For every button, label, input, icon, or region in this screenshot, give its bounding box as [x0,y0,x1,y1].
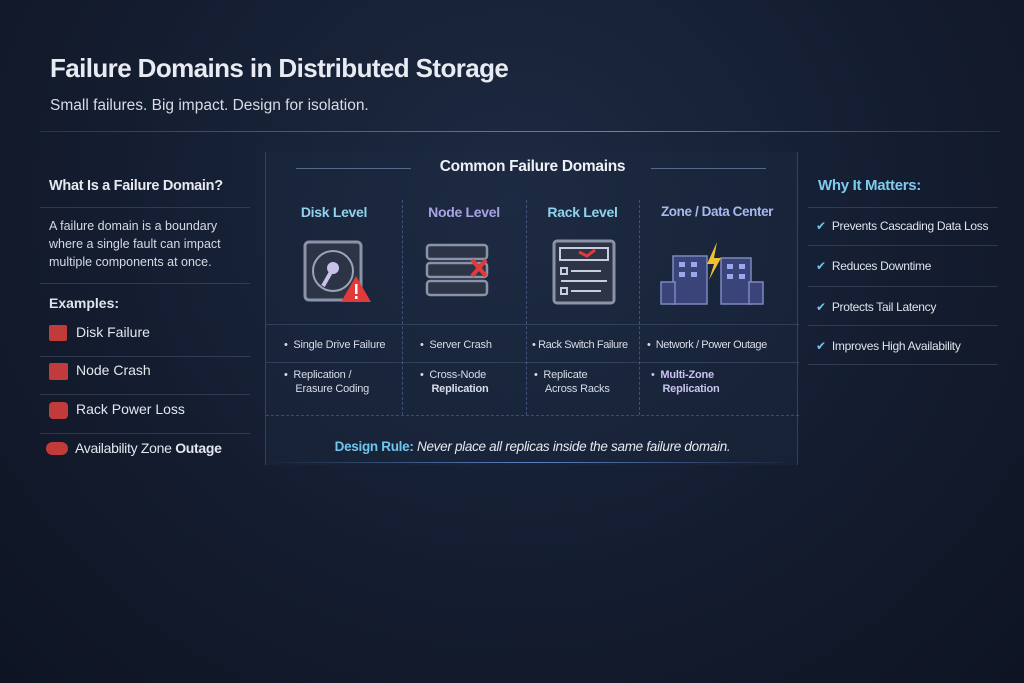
column: disk level: Disk Level [301,204,367,220]
column: zone / data center: • Multi-Zone [651,369,714,381]
design rule callout: Design Rule: Never place all replicas inside the same failure domain. [335,439,730,454]
example: node crash: Node Crash [76,362,151,378]
heading: What Is a Failure Domain? [49,178,223,194]
column: rack level [532,204,628,395]
column: node level: • Server Crash [420,339,492,351]
column: zone / data center: Replication [662,383,720,395]
column dividers [402,200,403,415]
icon: rack with broken switch [552,240,616,304]
column: disk level: Erasure Coding [295,383,369,395]
panel heading: Common Failure Domains [440,158,625,175]
example: disk failure: Disk Failure [76,324,150,340]
subtitle: Small failures. Big impact. Design for isolation. [50,97,369,114]
panel: what is a failure domain [40,178,250,456]
example: node crash [49,362,151,380]
column: rack level: Across Racks [545,383,610,395]
column: node level: Replication [431,383,489,395]
column: zone / data center: • Network / Power Outage [647,339,767,351]
column: node level: Node Level [428,204,500,220]
benefit list: ✔ Protects Tail Latency [816,300,936,314]
column: node level: • Cross-Node [420,369,486,381]
example: rack power loss: Rack Power Loss [76,401,185,417]
column: disk level: • Single Drive Failure [284,339,385,351]
column: zone / data center: Zone / Data Center [661,204,773,219]
icon: hard drive with warning [304,240,371,302]
heading: Why It Matters: [818,177,921,194]
icon: buildings with lightning [660,242,764,305]
icon: server with X [426,244,488,296]
header glow line [40,131,1000,132]
column: disk level: • Replication / [284,369,351,381]
column: rack level: Rack Level [547,204,618,220]
benefit list: ✔ Prevents Cascading Data Loss [816,219,988,233]
panel: why it matters [808,177,998,365]
benefit list [808,219,998,365]
column: disk level [284,204,385,395]
examples heading: Examples: [49,295,119,311]
panel: common failure domains [265,152,798,465]
title: Failure Domains in Distributed Storage [50,53,508,83]
benefit list: ✔ Improves High Availability [816,339,961,353]
column: rack level: • Replicate [534,369,587,381]
column: node level [420,204,500,395]
benefit list: ✔ Reduces Downtime [816,259,931,273]
example: disk failure [49,324,150,341]
column: zone / data center [647,204,774,395]
example: availability zone outage: Availability Zone Outage [75,440,222,456]
definition text: A failure domain is a boundary where a single fault can impact multiple components at once. [49,219,221,269]
column: rack level: • Rack Switch Failure [532,339,628,351]
